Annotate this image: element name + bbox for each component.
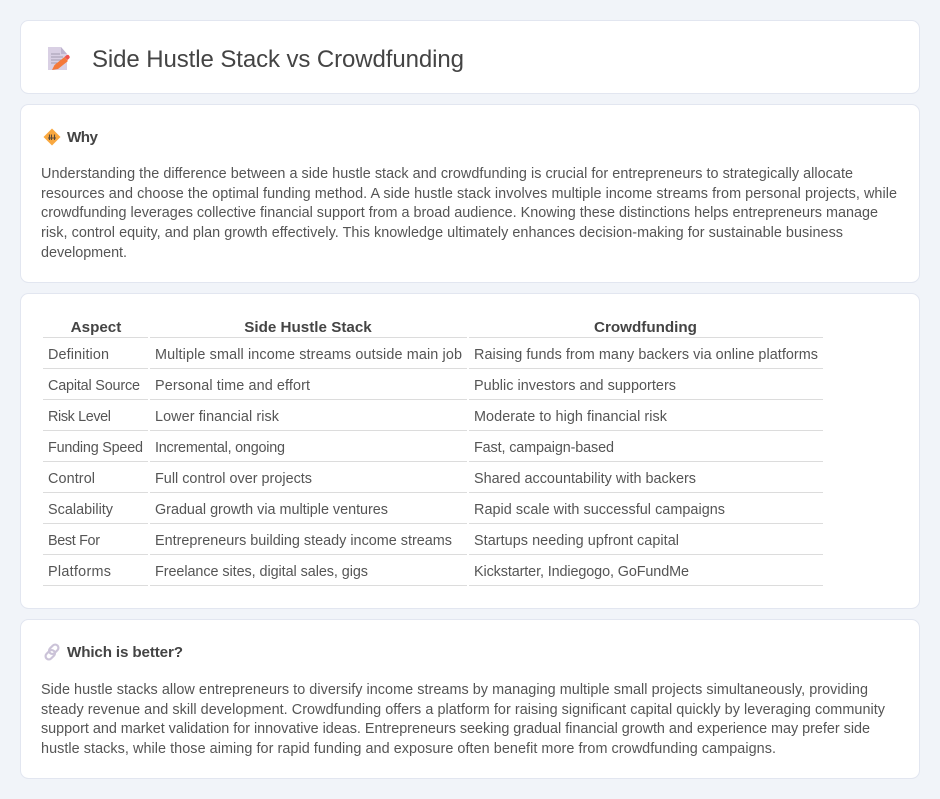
row: funding speed bbox=[48, 440, 614, 456]
table header bbox=[71, 319, 697, 336]
row: platforms: Kickstarter, Indiegogo, GoFundMe bbox=[474, 564, 689, 580]
row: definition: Multiple small income streams outside main job bbox=[155, 347, 462, 363]
row: platforms: Freelance sites, digital sales, gigs bbox=[155, 564, 368, 580]
row: best for: Best For bbox=[48, 533, 100, 549]
text block: why: resources and choose the optimal funding method. A side hustle stack involves multiple income streams from personal projects, while bbox=[41, 186, 897, 202]
panel: header bbox=[20, 20, 920, 94]
text block: why: risk, control equity, and plan growth effectively. This knowledge ultimately enhances decision-making for sustainable business bbox=[41, 225, 843, 241]
row: control bbox=[48, 471, 696, 487]
text block: why: crowdfunding leverages collective financial support from a broad audience. Knowing these distinctions helps entrepreneurs manage bbox=[41, 205, 878, 221]
panel: comparison table bbox=[20, 294, 920, 608]
heading: which is better: Which is better? bbox=[67, 644, 183, 661]
row: control: Full control over projects bbox=[155, 471, 312, 487]
text block: why: development. bbox=[41, 245, 127, 261]
row: definition: Raising funds from many backers via online platforms bbox=[474, 347, 818, 363]
row: risk level: Moderate to high financial risk bbox=[474, 409, 668, 425]
title: Side Hustle Stack vs Crowdfunding bbox=[92, 46, 464, 73]
panel: which is better bbox=[20, 620, 920, 778]
row: risk level: Risk Level bbox=[48, 409, 111, 425]
row: funding speed: Funding Speed bbox=[48, 440, 143, 456]
icon: link bbox=[44, 643, 60, 661]
row: capital source: Public investors and supporters bbox=[474, 378, 676, 394]
row: capital source: Capital Source bbox=[48, 378, 140, 394]
row: platforms bbox=[48, 564, 689, 580]
text block: which is better: hustle stacks, while those aiming for rapid funding and exposure often benefit more from crowdfunding campaigns. bbox=[41, 741, 776, 757]
text block: which is better bbox=[41, 682, 886, 757]
text block: which is better: Side hustle stacks allow entrepreneurs to diversify income streams by managing multiple small projects simultaneously, providing bbox=[41, 682, 868, 698]
table header: Aspect bbox=[71, 319, 121, 336]
text block: why: Understanding the difference between a side hustle stack and crowdfunding is crucial for entrepreneurs to strategically allocate bbox=[41, 166, 853, 182]
text block: which is better: steady revenue and skill development. Crowdfunding offers a platform for raising significant capital quickly by leveraging community bbox=[41, 702, 886, 718]
row: capital source: Personal time and effort bbox=[155, 378, 310, 394]
row: funding speed: Incremental, ongoing bbox=[155, 440, 285, 456]
row: best for: Entrepreneurs building steady income streams bbox=[155, 533, 452, 549]
row: capital source bbox=[48, 378, 676, 394]
heading: why: Why bbox=[67, 129, 99, 146]
row: best for bbox=[48, 533, 679, 549]
icon: construction diamond bbox=[44, 128, 60, 146]
table header: Side Hustle Stack bbox=[244, 319, 372, 336]
row: control: Shared accountability with backers bbox=[474, 471, 696, 487]
text block: why bbox=[41, 166, 897, 261]
row: definition bbox=[48, 347, 818, 363]
row: funding speed: Fast, campaign-based bbox=[474, 440, 614, 456]
row: best for: Startups needing upfront capital bbox=[474, 533, 679, 549]
row: platforms: Platforms bbox=[48, 564, 111, 580]
row: scalability: Rapid scale with successful campaigns bbox=[474, 502, 725, 518]
row: risk level: Lower financial risk bbox=[155, 409, 280, 425]
row: risk level bbox=[48, 409, 668, 425]
row: control: Control bbox=[48, 471, 95, 487]
icon: memo with pencil bbox=[48, 47, 70, 70]
row: scalability: Gradual growth via multiple ventures bbox=[155, 502, 388, 518]
text block: which is better: support and market validation for innovative ideas. Entrepreneurs seeking gradual financial growth and experience may prefer side bbox=[41, 721, 870, 737]
panel: why bbox=[20, 104, 920, 282]
table header: Crowdfunding bbox=[594, 319, 697, 336]
row: scalability bbox=[48, 502, 725, 518]
row: scalability: Scalability bbox=[48, 502, 114, 518]
row: definition: Definition bbox=[48, 347, 109, 363]
